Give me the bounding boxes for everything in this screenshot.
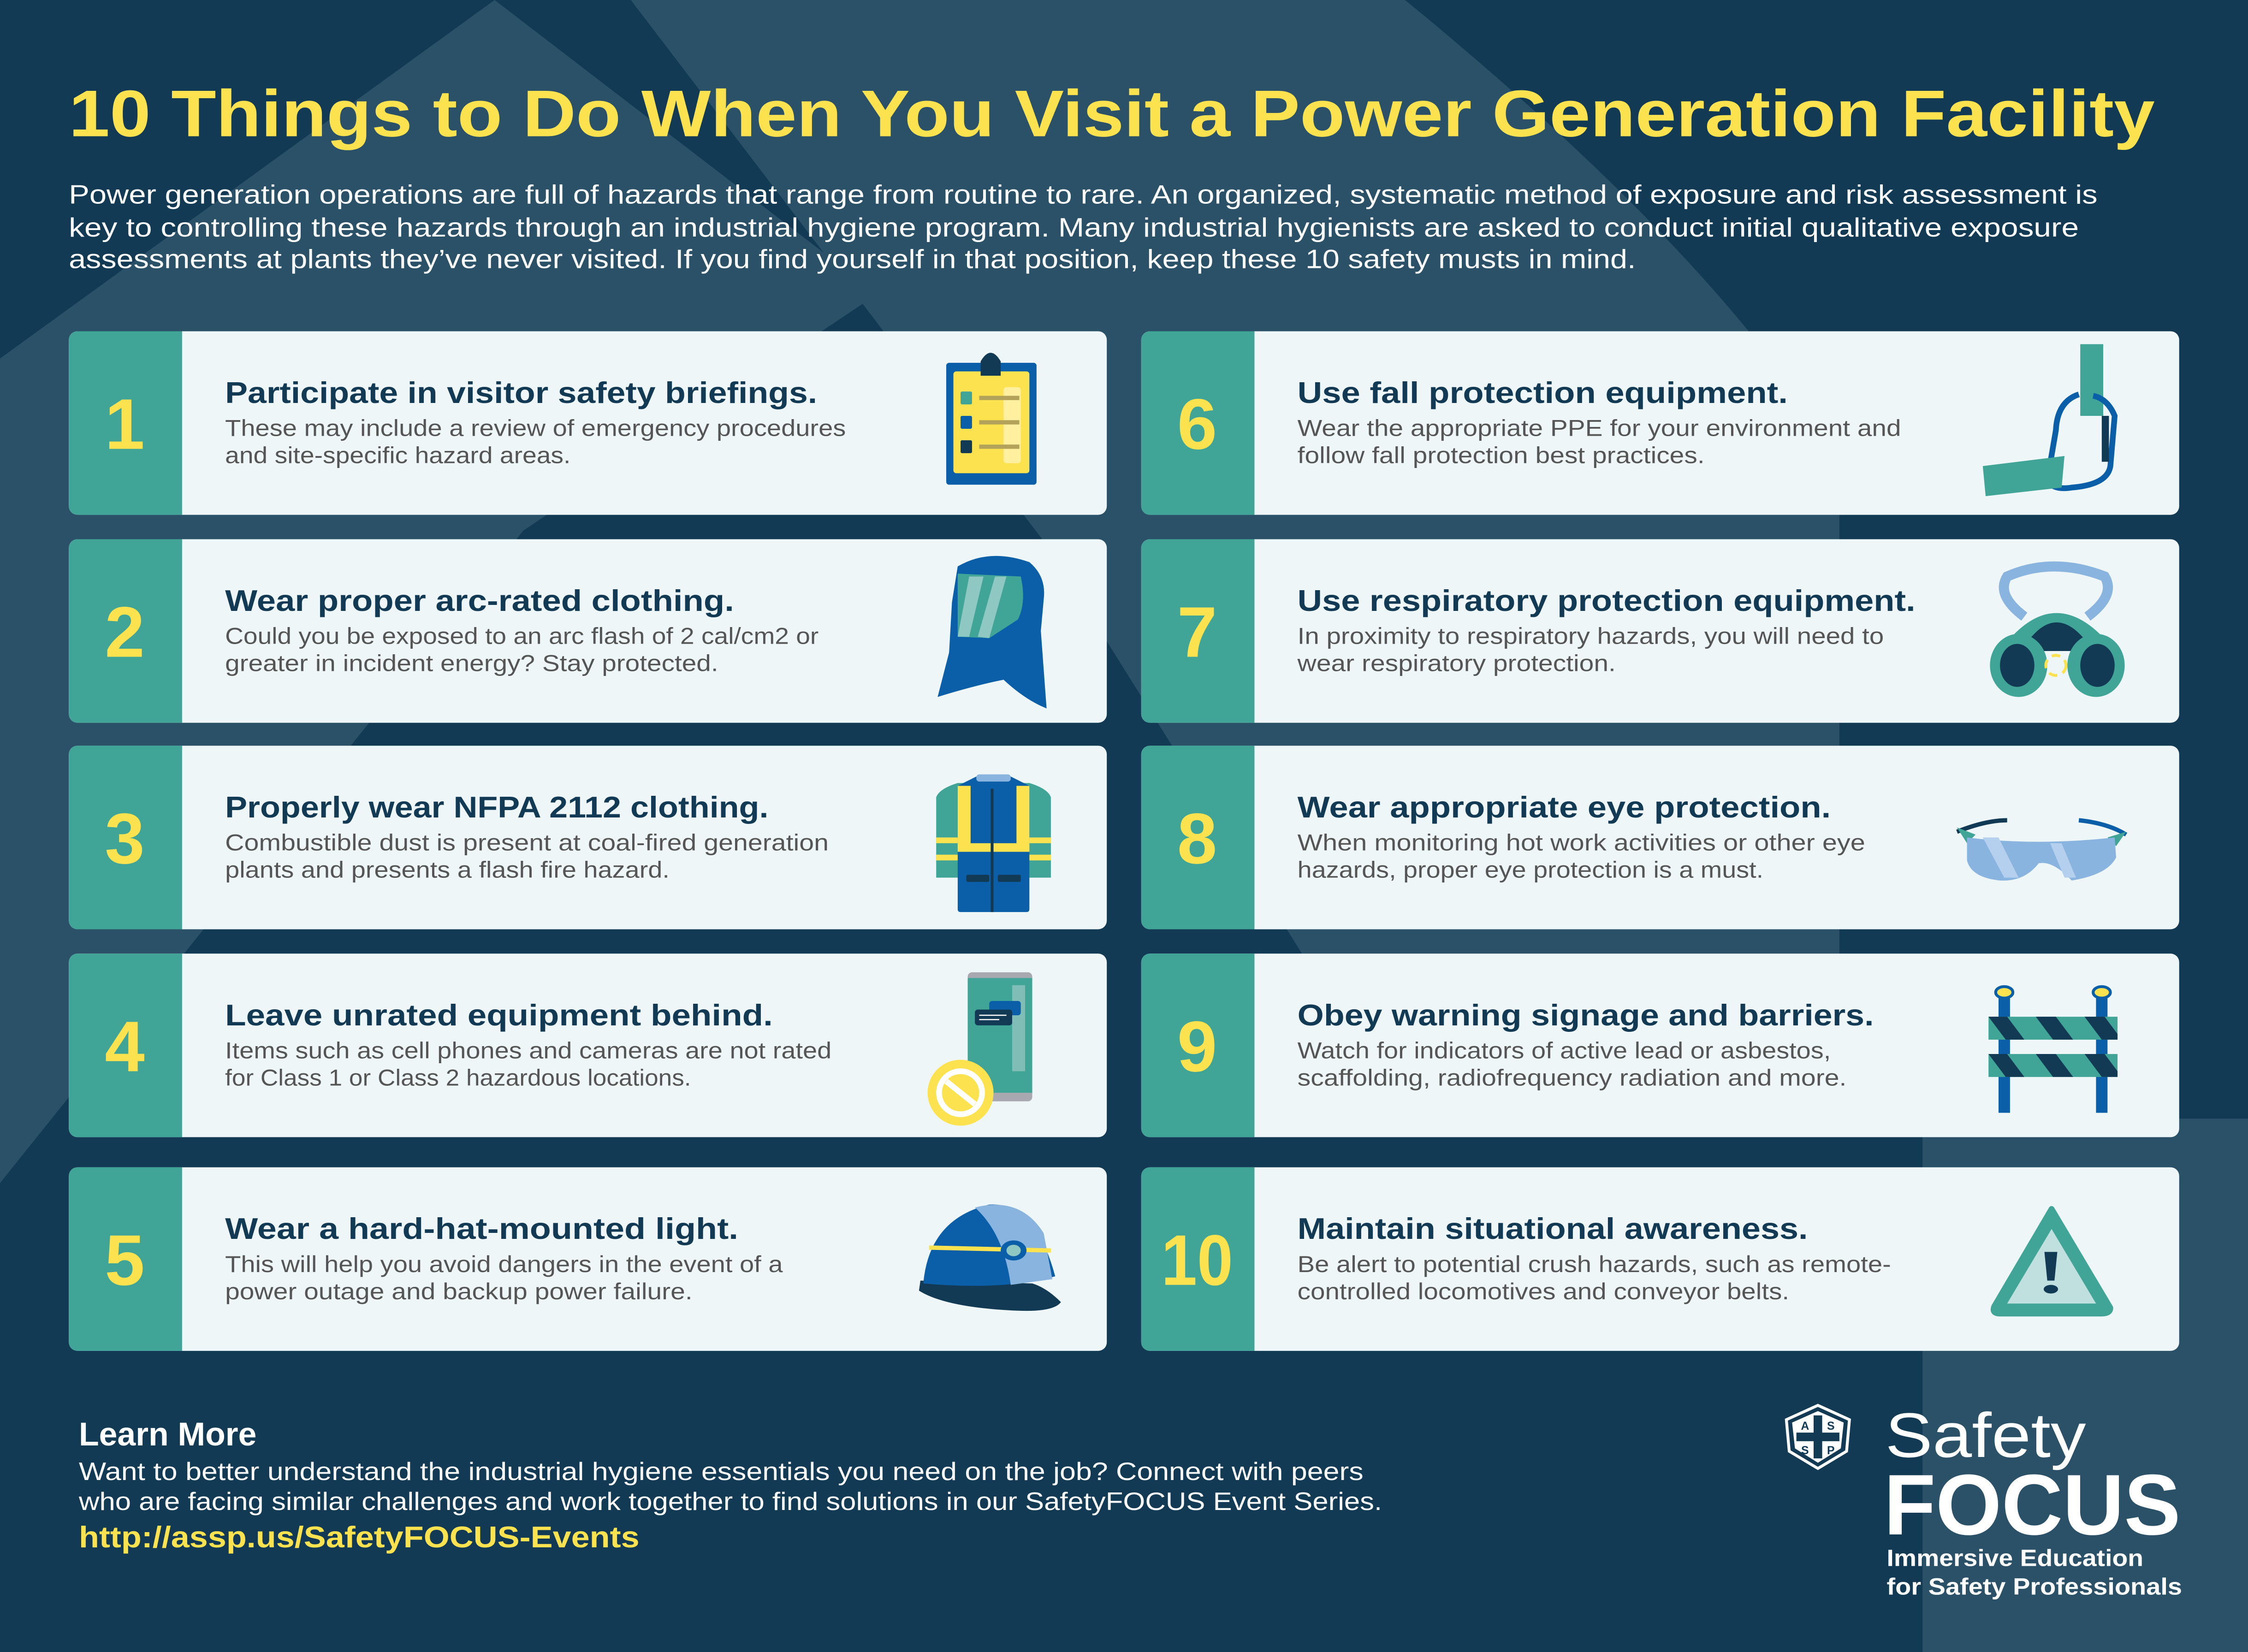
card 8: hazards, proper eye protection is a must.: [1298, 857, 1763, 882]
intro paragraph: assessments at plants they’ve never visited. If you find yourself in that position, keep these 10 safety musts in mind.: [69, 245, 1636, 274]
card 3: plants and presents a flash fire hazard.: [225, 857, 670, 882]
icon: hard hat with light: [919, 1204, 1061, 1311]
card 5: Wear a hard-hat-mounted light.: [225, 1212, 738, 1245]
icon: safety goggles: [1957, 820, 2126, 881]
card 3: [69, 746, 1107, 929]
card 1: Participate in visitor safety briefings.: [225, 376, 817, 409]
card 4: for Class 1 or Class 2 hazardous locations.: [225, 1065, 691, 1090]
card 6: follow fall protection best practices.: [1298, 443, 1705, 468]
intro paragraph: key to controlling these hazards through an industrial hygiene program. Many industrial hygienists are asked to conduct initial qualitative exposure: [69, 213, 2079, 243]
card 10: [1141, 1167, 2179, 1351]
card 5: [69, 1167, 1107, 1351]
card 9: Obey warning signage and barriers.: [1298, 998, 1874, 1032]
icon: respirator: [1990, 567, 2125, 697]
logo: ASSP shield: P: [1827, 1444, 1835, 1457]
card 6: Use fall protection equipment.: [1298, 376, 1788, 409]
learn more section: http://assp.us/SafetyFOCUS-Events: [79, 1520, 640, 1554]
card 2: greater in incident energy? Stay protected.: [225, 651, 718, 676]
card 5: This will help you avoid dangers in the event of a: [225, 1251, 783, 1277]
card 5: power outage and backup power failure.: [225, 1279, 693, 1304]
logo: ASSP shield: [1786, 1405, 1850, 1468]
card 1: and site-specific hazard areas.: [225, 443, 570, 468]
card 6: [1141, 331, 2179, 515]
card 10: controlled locomotives and conveyor belts.: [1298, 1279, 1789, 1304]
learn more section: Learn More: [79, 1416, 256, 1453]
card 7: wear respiratory protection.: [1297, 651, 1616, 676]
card 10: Be alert to potential crush hazards, such as remote-: [1298, 1251, 1891, 1277]
card 3: 3: [105, 798, 145, 878]
card 10: Maintain situational awareness.: [1298, 1212, 1808, 1245]
title: 10 Things to Do When You Visit a Power Generation Facility: [69, 77, 2155, 150]
logo: SafetyFOCUS wordmark: Immersive Education: [1887, 1545, 2143, 1571]
card 2: Wear proper arc-rated clothing.: [225, 584, 734, 617]
card 1: [69, 331, 1107, 515]
card 9: 9: [1177, 1006, 1217, 1086]
learn more section: Want to better understand the industrial hygiene essentials you need on the job? Connect with peers: [79, 1457, 1364, 1486]
card 9: [1141, 953, 2179, 1137]
icon: jacket: [936, 775, 1051, 912]
logo: SafetyFOCUS wordmark: FOCUS: [1884, 1457, 2181, 1553]
card 2: Could you be exposed to an arc flash of 2 cal/cm2 or: [225, 623, 819, 649]
card 3: Combustible dust is present at coal-fired generation: [225, 829, 829, 855]
logo: SafetyFOCUS wordmark: Safety: [1885, 1400, 2086, 1470]
card 7: [1141, 539, 2179, 723]
card 7: Use respiratory protection equipment.: [1298, 584, 1916, 617]
icon: arc flash hood: [937, 556, 1047, 708]
card 8: Wear appropriate eye protection.: [1298, 790, 1831, 824]
card 4: [69, 953, 1107, 1137]
card 4: Items such as cell phones and cameras are not rated: [225, 1037, 831, 1063]
learn more section: [78, 1416, 1382, 1554]
card 2: [69, 539, 1107, 723]
card 5: 5: [105, 1220, 145, 1300]
logo: SafetyFOCUS wordmark: [1884, 1400, 2182, 1600]
logo: ASSP shield: S: [1827, 1420, 1835, 1433]
icon: clipboard: [946, 353, 1037, 485]
card 7: 7: [1177, 592, 1217, 672]
card 6: Wear the appropriate PPE for your environment and: [1298, 415, 1901, 441]
card 1: These may include a review of emergency procedures: [225, 415, 846, 441]
icon: barrier: [1988, 987, 2118, 1113]
intro paragraph: Power generation operations are full of hazards that range from routine to rare. An organized, systematic method of exposure and risk assessment is: [69, 180, 2098, 210]
icon: fall harness: [1983, 344, 2115, 496]
card 8: 8: [1177, 798, 1217, 878]
card 1: 1: [105, 384, 145, 464]
card 9: scaffolding, radiofrequency radiation and more.: [1298, 1065, 1846, 1090]
card 6: 6: [1177, 384, 1217, 464]
logo: ASSP shield: A: [1801, 1420, 1809, 1433]
card 8: When monitoring hot work activities or other eye: [1298, 829, 1865, 855]
icon: phone with prohibition sign: [928, 972, 1032, 1126]
card 9: Watch for indicators of active lead or asbestos,: [1298, 1037, 1831, 1063]
card 10: 10: [1161, 1220, 1233, 1300]
card 4: 4: [105, 1006, 145, 1086]
icon: warning triangle: [1993, 1209, 2111, 1314]
card 2: 2: [105, 592, 145, 672]
intro paragraph: [69, 180, 2098, 274]
logo: SafetyFOCUS wordmark: for Safety Professionals: [1887, 1574, 2182, 1600]
logo: ASSP shield: S: [1801, 1444, 1809, 1457]
card 4: Leave unrated equipment behind.: [225, 998, 773, 1032]
card 3: Properly wear NFPA 2112 clothing.: [225, 790, 768, 824]
learn more section: who are facing similar challenges and work together to find solutions in our SafetyFOCUS Event Series.: [78, 1487, 1382, 1516]
card 8: [1141, 746, 2179, 929]
card 7: In proximity to respiratory hazards, you will need to: [1298, 623, 1884, 649]
